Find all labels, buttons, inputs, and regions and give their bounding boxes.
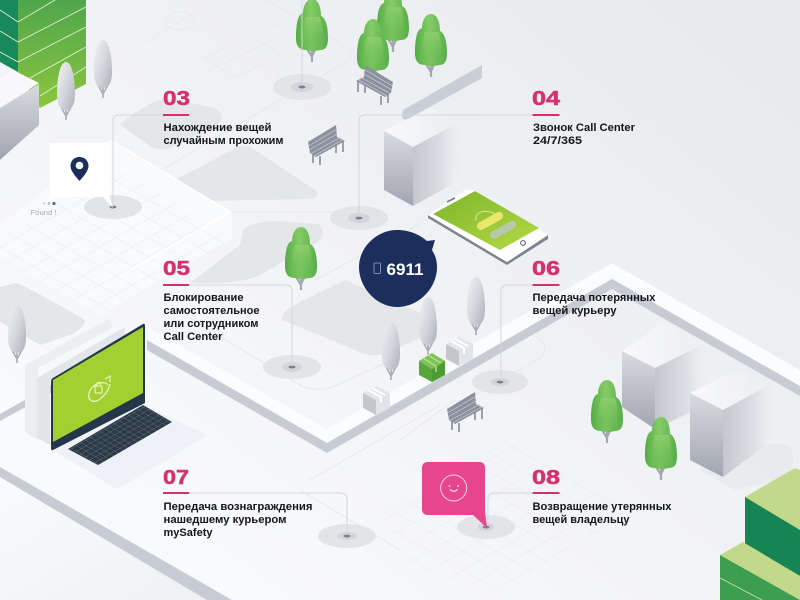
pathways thin outlines: [165, 0, 545, 550]
icon: location pin: [70, 157, 88, 181]
panel: found location card: [30, 143, 113, 217]
callout 04: Звонок Call Center: [533, 122, 636, 134]
callout 07: [163, 467, 312, 539]
smartphone: [428, 190, 548, 265]
badge: phone number 6911: [359, 230, 437, 307]
football field lines: [140, 0, 290, 78]
callout 06: вещей курьеру: [532, 305, 617, 317]
callout 05: самостоятельное: [164, 305, 260, 317]
callout 07: Передача вознаграждения: [164, 501, 312, 513]
callout 05: Блокирование: [164, 292, 244, 304]
white building top-left: [0, 70, 39, 160]
callout 04: [532, 88, 636, 147]
callout 03: Нахождение вещей: [164, 122, 272, 134]
laptop: [25, 318, 208, 488]
callout 03: случайным прохожим: [164, 135, 284, 147]
icon: lock with arrow: [89, 376, 110, 401]
label: found: Found !: [30, 208, 56, 217]
callout 04: 24/7/365: [533, 135, 582, 147]
green trees: [285, 0, 677, 480]
callout 05: или сотрудником: [164, 318, 258, 330]
raised platform edge: [402, 65, 482, 120]
speech bubble: happy face: [422, 462, 487, 528]
callout 05: Call Center: [164, 331, 223, 343]
callout 06: 06: [532, 258, 560, 280]
callout 07: 07: [163, 467, 189, 489]
lower-left ground plane: [0, 470, 232, 600]
benches: [308, 65, 484, 432]
green building top-left: [0, 0, 86, 108]
callout 04: 04: [532, 88, 561, 110]
callout 07: mySafety: [164, 527, 213, 539]
boxes: [363, 337, 473, 415]
callout 06: Передача потерянных: [532, 292, 656, 304]
callout 08: 08: [532, 467, 560, 489]
callout 08: [532, 467, 672, 526]
grey trees: [8, 40, 485, 380]
callout 05: [163, 258, 260, 343]
building centre: [384, 108, 460, 206]
callout 05: 05: [163, 258, 190, 280]
number: 6911: [386, 260, 424, 279]
carousel dots: [43, 202, 56, 205]
callout 08: Возвращение утерянных: [532, 501, 672, 513]
callout 03: 03: [163, 88, 190, 110]
callout 06: [532, 258, 656, 317]
building right 1: [622, 322, 706, 429]
laptop base: [53, 403, 208, 488]
building right 2: [690, 370, 773, 477]
isometric grid: delivery area: [375, 440, 630, 590]
icon: phone: [374, 263, 380, 274]
isometric grid: found area: [0, 140, 232, 315]
marker shadows and connectors: [84, 0, 532, 548]
laptop ghost screens: [25, 318, 125, 445]
keyboard: [68, 405, 172, 465]
callout 03: [163, 88, 284, 147]
callout 07: нашедшему курьером: [164, 514, 286, 526]
green steps bottom-right: [720, 468, 800, 600]
laptop screen: [51, 324, 145, 450]
ground shadows: [0, 99, 793, 490]
callout 08: вещей владельцу: [532, 514, 630, 526]
road: upper white strip with grey edge: [0, 263, 800, 600]
